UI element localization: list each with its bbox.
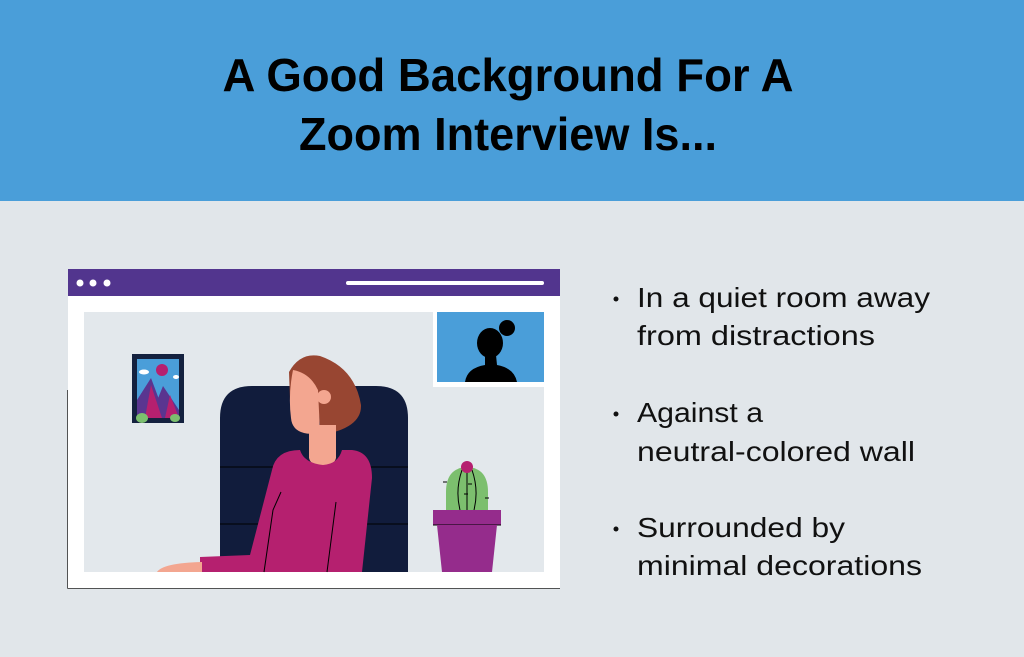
bullet list: neutral-colored wall <box>637 436 915 467</box>
bullet list: from distractions <box>637 320 875 351</box>
bullet list: Against a <box>637 397 763 428</box>
cactus plant <box>433 461 501 572</box>
bullet list: minimal decorations <box>637 550 922 581</box>
person <box>157 355 372 572</box>
title bar <box>68 269 560 296</box>
bullet list: Surrounded by <box>637 512 845 543</box>
shirt <box>200 450 372 572</box>
hair <box>289 355 361 435</box>
title: Zoom Interview Is... <box>299 108 717 160</box>
bullet list: In a quiet room away <box>637 282 930 313</box>
chair <box>220 386 408 572</box>
wall picture <box>132 354 184 423</box>
room scene <box>84 312 544 572</box>
header band <box>0 0 1024 201</box>
neck <box>309 425 336 466</box>
illustration: video call window <box>68 269 560 588</box>
hand <box>157 562 202 572</box>
face <box>290 370 320 434</box>
title: A Good Background For A <box>222 49 794 101</box>
title <box>222 49 794 160</box>
bullet list <box>614 282 930 581</box>
self view: interviewer silhouette <box>433 312 544 387</box>
